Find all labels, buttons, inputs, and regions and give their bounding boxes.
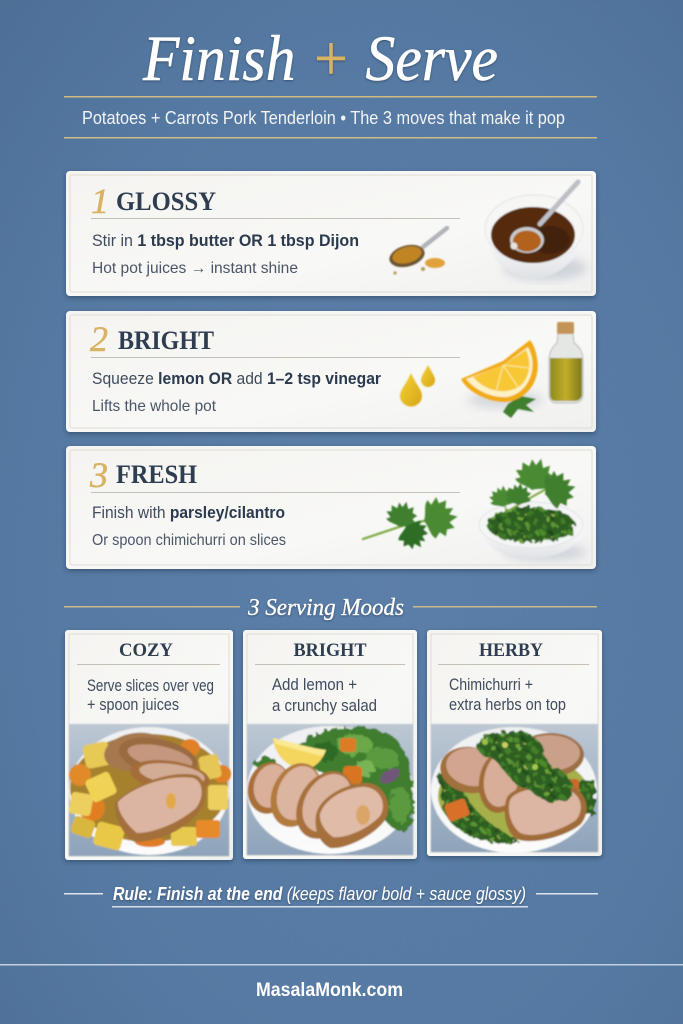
icon: bowl of sauce — [485, 182, 587, 280]
icon: drops — [400, 365, 435, 406]
icon: bowl of herbs — [479, 454, 587, 560]
number 2: 2 — [90, 319, 108, 359]
heading: bright mood: BRIGHT — [294, 640, 367, 661]
icon: lemon wedge and leaf — [461, 340, 543, 418]
text: cozy: Serve slices over veg — [87, 677, 214, 695]
panel: fresh — [66, 446, 596, 569]
text: herby: Chimichurri + — [449, 676, 533, 694]
heading: herby: HERBY — [479, 640, 543, 661]
panel: bright — [66, 311, 596, 432]
panel: cozy: + spoon juices — [87, 696, 179, 714]
heading: glossy: GLOSSY — [116, 187, 216, 216]
title: Finish + Serve — [142, 23, 498, 95]
panel: glossy — [66, 171, 596, 296]
heading: fresh: FRESH — [116, 460, 197, 489]
footer: MasalaMonk.com — [256, 979, 403, 1001]
heading: bright: BRIGHT — [118, 326, 214, 355]
photo: pork with chimichurri — [431, 724, 598, 853]
heading: 3 serving moods: 3 Serving Moods — [247, 595, 404, 621]
icon: oil bottle — [549, 322, 583, 403]
panel: bright mood: a crunchy salad — [272, 697, 377, 715]
panel: cozy — [65, 630, 233, 860]
subtitle band: Potatoes + Carrots Pork Tenderloin • The 3 moves that make it pop — [82, 107, 565, 128]
number 3: 3 — [89, 455, 108, 495]
photo: pork with lemon and salad — [242, 724, 414, 855]
panel: herby — [427, 630, 602, 856]
salad — [253, 727, 414, 832]
panel: herby: extra herbs on top — [449, 696, 566, 714]
text: fresh instruction: Finish with parsley/cilantro — [92, 503, 285, 522]
text: glossy instruction: Stir in 1 tbsp butter OR 1 tbsp Dijon — [92, 231, 359, 250]
text: bright mood: Add lemon + — [272, 676, 357, 694]
text: bright instruction: Squeeze lemon OR add 1–2 tsp vinegar — [92, 369, 381, 388]
callout: rule: Rule: Finish at the end (keeps flavor bold + sauce glossy) — [113, 884, 526, 904]
text: glossy note: Hot pot juices → instant shine — [92, 260, 298, 277]
photo: pork with potatoes and carrots — [68, 724, 231, 856]
icon: parsley sprig — [363, 494, 461, 556]
text: bright note: Lifts the whole pot — [92, 398, 217, 415]
panel: bright mood — [242, 630, 417, 859]
icon: small spoon — [387, 228, 447, 275]
heading: cozy: COZY — [119, 640, 173, 661]
number 1: 1 — [91, 181, 109, 221]
text: fresh note: Or spoon chimichurri on slices — [92, 532, 286, 549]
